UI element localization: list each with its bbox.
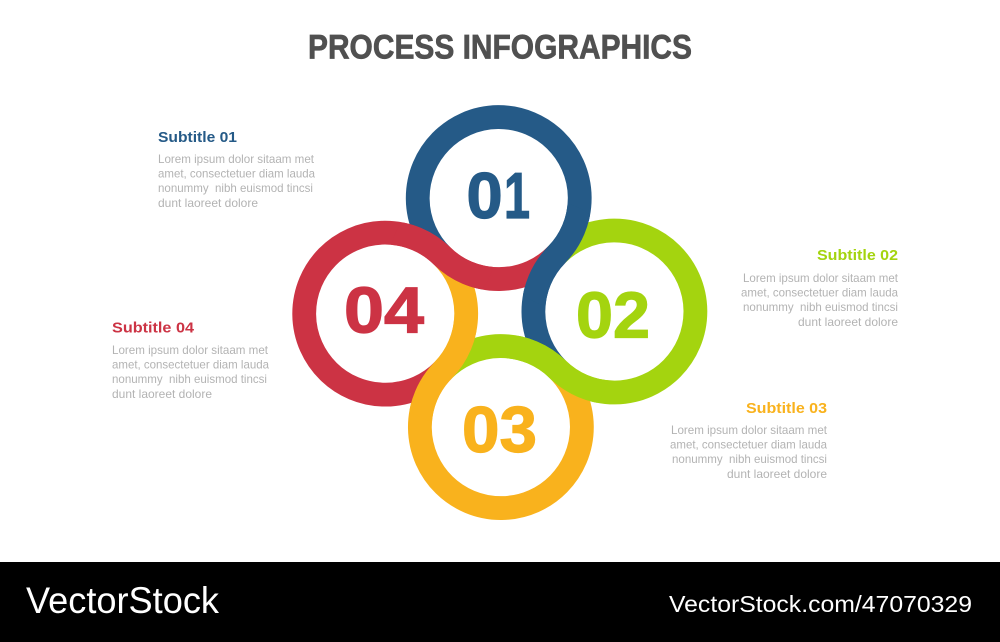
text block: subtitle 01: amet, consectetuer diam lauda (158, 166, 315, 180)
number 01: 1 (504, 161, 530, 233)
number 01: 0 (466, 159, 503, 232)
text block: subtitle 02: Lorem ipsum dolor sitaam met (743, 271, 899, 285)
footer logo text: VectorStock (26, 579, 219, 621)
weave overlap: red over orange and blue (391, 222, 493, 290)
ring 02: green (443, 230, 695, 392)
text block: subtitle 03: Lorem ipsum dolor sitaam met (671, 423, 828, 437)
footer image id: VectorStock.com/47070329 (669, 591, 972, 617)
text block: subtitle 02: nonummy nibh euismod tincsi (743, 300, 898, 314)
text block: subtitle 03: Subtitle 03 (746, 400, 827, 417)
text block: subtitle 04 (112, 320, 269, 401)
text block: subtitle 02 (741, 247, 899, 329)
ring 01: blue (418, 117, 580, 369)
text block: subtitle 01: dunt laoreet dolore (158, 196, 258, 210)
number 03: 03 (462, 393, 537, 466)
interlocking rings diagram (304, 117, 695, 508)
weave overlap: green over blue and orange (506, 336, 608, 403)
text block: subtitle 01 (158, 129, 315, 210)
text block: subtitle 02: dunt laoreet dolore (798, 315, 898, 329)
text block: subtitle 01: Lorem ipsum dolor sitaam met (158, 152, 315, 166)
text block: subtitle 02: Subtitle 02 (817, 247, 898, 264)
text block: subtitle 03: nonummy nibh euismod tincsi (672, 452, 827, 466)
number 02: 02 (576, 278, 650, 352)
footer bar (0, 562, 1000, 642)
ring 03: orange (420, 256, 582, 508)
weave overlap: orange over green and red (410, 320, 476, 421)
text block: subtitle 01: nonummy nibh euismod tincsi (158, 181, 313, 195)
text block: subtitle 04: nonummy nibh euismod tincsi (112, 372, 267, 386)
text block: subtitle 04: dunt laoreet dolore (112, 387, 212, 401)
text block: subtitle 04: Lorem ipsum dolor sitaam met (112, 343, 269, 357)
number 01 (466, 159, 530, 233)
number 04: 04 (344, 274, 424, 346)
ring 04: red (304, 233, 557, 395)
text block: subtitle 03: amet, consectetuer diam lauda (670, 438, 827, 452)
text block: subtitle 04: amet, consectetuer diam lauda (112, 358, 269, 372)
text block: subtitle 03 (670, 400, 828, 481)
weave overlap: blue over green and red (523, 204, 590, 306)
text block: subtitle 04: Subtitle 04 (112, 320, 195, 336)
title: PROCESS INFOGRAPHICS (308, 28, 692, 66)
text block: subtitle 03: dunt laoreet dolore (727, 467, 827, 481)
text block: subtitle 01: Subtitle 01 (158, 129, 237, 146)
text block: subtitle 02: amet, consectetuer diam lauda (741, 286, 898, 300)
